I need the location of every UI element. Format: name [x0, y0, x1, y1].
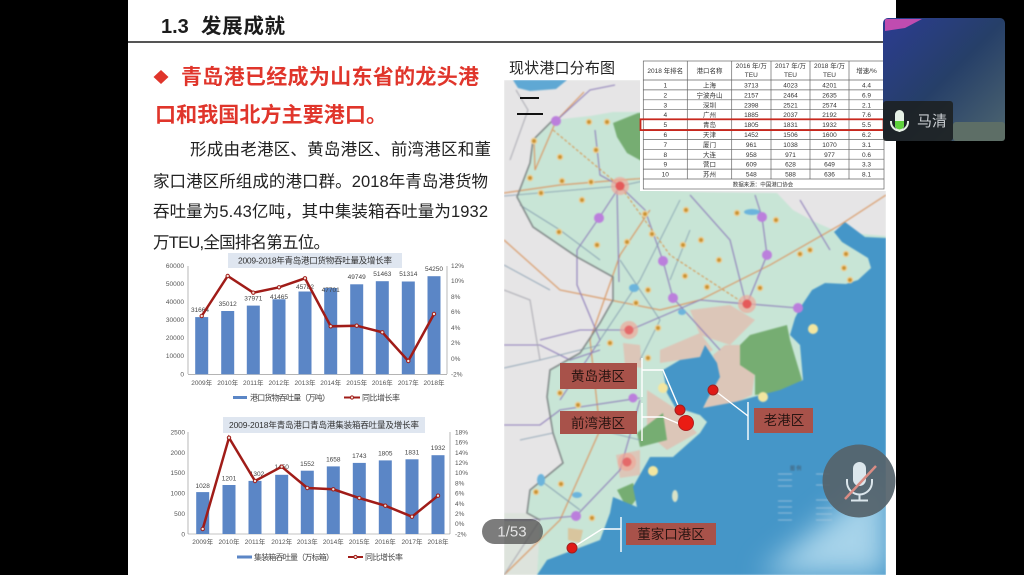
chart: container throughput [171, 417, 468, 562]
chart title: 2009-2018年青岛港口货物吞吐量及增长率 [238, 256, 392, 266]
table: port ranking: 958 [746, 152, 757, 159]
chart: cargo throughput: 4% [451, 325, 461, 332]
chart: cargo throughput: 47701 [322, 287, 340, 294]
chart: cargo throughput: 2013年 [295, 378, 316, 387]
table: port ranking: 港口名称 [696, 66, 723, 75]
body paragraph: 万TEU,全国排名第五位。 [153, 233, 330, 252]
muted microphone button [822, 444, 896, 518]
green zones [613, 113, 802, 510]
table: port ranking: 2018 年/万 [814, 61, 846, 70]
chart title: 2009-2018年青岛港口青岛港集装箱吞吐量及增长率 [229, 420, 419, 430]
chart: container throughput: 2000 [171, 450, 185, 457]
label: dongjiakou port area: 董家口港区 [637, 526, 705, 542]
handwritten strokes [517, 97, 543, 115]
table: port ranking: 5.5 [862, 122, 871, 129]
chart: cargo throughput: 2017年 [398, 378, 419, 387]
icon: microphone [891, 110, 908, 132]
table: port ranking: 1805 [744, 122, 759, 129]
chart: cargo throughput: 2014年 [320, 378, 342, 387]
table: port ranking: 厦门 [703, 140, 716, 149]
key point heading: 青岛港已经成为山东省的龙头港 [181, 65, 479, 89]
roads [504, 92, 886, 575]
chart: container throughput: 8% [455, 480, 465, 488]
chart: container throughput: 14% [455, 450, 468, 457]
legend [233, 392, 400, 402]
table: port ranking: 8.1 [862, 172, 871, 179]
chart: cargo throughput: 41465 [270, 294, 288, 301]
table: port ranking: 2018 年排名 [647, 66, 683, 75]
table: port ranking: 4201 [822, 82, 837, 90]
chart title [223, 417, 425, 433]
chart: container throughput: 10% [455, 470, 468, 477]
chart: cargo throughput: 30000 [166, 317, 184, 324]
body paragraph: 家口港区所组成的港口群。2018年青岛港货物 [153, 172, 488, 191]
chart: cargo throughput: -2% [451, 372, 463, 378]
chart: container throughput: 0% [455, 521, 465, 528]
table: port ranking: 天津 [703, 131, 716, 139]
label: lao port area: 老港区 [764, 413, 804, 428]
chart: cargo throughput: 50000 [166, 281, 184, 288]
table: port ranking: TEU [823, 72, 836, 79]
table: port ranking: 1070 [822, 142, 837, 149]
table: port ranking: 2037 [783, 112, 798, 119]
chart: cargo throughput: 2015年 [346, 378, 368, 387]
page indicator: 1/53 [497, 524, 527, 540]
map title [504, 55, 622, 80]
chart: container throughput: 16% [455, 440, 468, 446]
body paragraph [153, 140, 491, 252]
urban zones [568, 305, 755, 543]
region border strokes [517, 120, 613, 520]
chart: container throughput: 1552 [300, 461, 315, 468]
table: port ranking: 6.2 [862, 132, 871, 139]
table: port ranking: 宁波舟山 [696, 90, 722, 99]
table: port ranking: 4.4 [862, 82, 871, 90]
chart: cargo throughput: 2011年 [243, 378, 264, 387]
chart: container throughput: 0 [181, 532, 185, 538]
table: port ranking: 数据来源：中国港口协会 [733, 180, 794, 188]
table: port ranking: 588 [785, 172, 796, 179]
table: port ranking: 苏州 [703, 170, 716, 179]
table: port ranking: 1932 [822, 122, 837, 129]
land region [517, 112, 886, 575]
chart: container throughput: 2011年 [245, 537, 266, 546]
chart: container throughput: 2% [455, 511, 465, 518]
legend: 集装箱吞吐量（万标箱） [254, 552, 334, 562]
chart: container throughput: 1450 [274, 464, 289, 471]
chart: container throughput: 4% [455, 501, 465, 508]
chart: container throughput: 2010年 [219, 537, 240, 546]
chart: cargo throughput: 2016年 [372, 378, 393, 387]
chart: container throughput: 2014年 [323, 537, 344, 546]
map title: 现状港口分布图 [509, 60, 615, 77]
chart: cargo throughput: 2012年 [269, 378, 290, 387]
table: port ranking: 8 [663, 152, 667, 159]
table: port ranking: 4 [663, 112, 667, 119]
legend: 同比增长率 [362, 392, 400, 402]
table: port ranking: 3 [663, 102, 667, 109]
table: port ranking: 1038 [783, 142, 798, 149]
chart: cargo throughput: 37971 [244, 296, 263, 302]
chart: container throughput: 2013年 [297, 537, 318, 546]
map legend [778, 474, 832, 520]
table: port ranking: 10 [662, 172, 669, 179]
chart: container throughput: 2015年 [349, 537, 370, 546]
body paragraph: 吞吐量为5.43亿吨，其中集装箱吞吐量为1932 [153, 202, 488, 221]
sea [537, 222, 886, 575]
chart: container throughput: 2018年 [428, 537, 449, 546]
table: port ranking: 2157 [744, 92, 759, 99]
yellow sea circles [648, 324, 818, 476]
table: port ranking: 1452 [744, 132, 759, 139]
chart: container throughput: 1201 [222, 476, 237, 482]
chart: container throughput: 2017年 [402, 537, 423, 546]
table: port ranking: 609 [746, 162, 757, 169]
chart: container throughput: 2012年 [271, 537, 293, 546]
chart: container throughput: 1831 [405, 450, 420, 456]
chart: cargo throughput [166, 253, 464, 402]
table: port ranking: 636 [824, 172, 835, 179]
name tag: 马清 [917, 113, 947, 130]
map: port distribution [504, 80, 886, 575]
table: port ranking: 深圳 [703, 100, 716, 109]
chart: cargo throughput: 49749 [348, 274, 366, 281]
label: qianwan port area: 前湾港区 [571, 415, 625, 431]
label: huangdao port area: 黄岛港区 [571, 369, 625, 384]
chart: container throughput: 6% [455, 490, 465, 498]
chart: container throughput: 12% [455, 460, 468, 467]
chart: cargo throughput: 2% [451, 340, 461, 347]
table: port ranking: 4023 [783, 82, 798, 90]
chart: container throughput: 1302 [250, 471, 265, 478]
table: port ranking: 5 [663, 122, 667, 129]
title [161, 14, 286, 38]
table: port ranking: 6.9 [862, 92, 871, 99]
chart: cargo throughput: 0% [451, 356, 461, 363]
label: lao port area [708, 385, 813, 440]
key point heading [154, 65, 479, 127]
table: port ranking: 1 [663, 82, 667, 90]
legend [237, 552, 403, 562]
chart: cargo throughput: 60000 [166, 263, 184, 270]
pink cities [611, 177, 756, 471]
chart: container throughput: 1658 [326, 456, 341, 464]
river at top [513, 80, 567, 91]
table: port ranking: 广州 [703, 110, 716, 119]
chart: cargo throughput: 10000 [166, 353, 184, 360]
key point heading: 口和我国北方主要港口。 [155, 103, 387, 127]
table: port ranking: 3.3 [862, 162, 871, 169]
chart: cargo throughput: 2009年 [191, 378, 213, 387]
table: port ranking: 1831 [783, 122, 798, 129]
chart: container throughput: 1500 [171, 470, 185, 477]
table: port ranking: 971 [785, 152, 796, 159]
chart: cargo throughput: 40000 [166, 299, 184, 306]
table: port ranking: 2521 [783, 102, 798, 109]
chart: container throughput: -2% [455, 532, 467, 538]
map: port distribution: 图 例 [790, 465, 801, 472]
chart: cargo throughput: 51314 [399, 271, 418, 278]
table: port ranking: 7 [663, 142, 667, 149]
label: dongjiakou port area [567, 517, 716, 553]
chart: container throughput: 1805 [378, 450, 393, 458]
chart: container throughput: 18% [455, 430, 468, 436]
table: port ranking: 2464 [783, 92, 798, 99]
chart: cargo throughput: 31664 [191, 307, 209, 314]
table: port ranking: 2574 [822, 102, 837, 109]
table: port ranking: 1506 [783, 132, 798, 139]
title: 发展成就 [201, 14, 286, 38]
chart: cargo throughput: 0 [180, 372, 184, 378]
table: port ranking: 3.1 [862, 142, 871, 149]
table: port ranking: 大连 [703, 150, 716, 159]
chart: cargo throughput: 12% [451, 263, 464, 270]
video tile [883, 18, 1005, 141]
islands [672, 490, 678, 502]
table: port ranking: 3713 [744, 82, 759, 90]
chart: cargo throughput: 35012 [219, 301, 237, 308]
chart: cargo throughput: 45782 [296, 284, 314, 291]
orange town dots [527, 119, 853, 521]
table: port ranking: 0.6 [862, 152, 871, 159]
table: port ranking [640, 55, 888, 191]
table: port ranking: 2 [663, 92, 667, 99]
table: port ranking: 上海 [703, 80, 716, 90]
table: port ranking: TEU [745, 72, 758, 79]
table: port ranking: 2.1 [862, 102, 871, 109]
table: port ranking: 2192 [822, 112, 837, 119]
highlight row: Qingdao [640, 119, 884, 130]
chart: cargo throughput: 2018年 [424, 378, 445, 387]
table: port ranking: 1600 [822, 132, 837, 139]
table: port ranking: 2017 年/万 [775, 61, 807, 70]
label: qianwan port area [560, 403, 694, 441]
table: port ranking: 548 [746, 172, 757, 179]
small lakes [744, 209, 760, 215]
legend: 港口货物吞吐量（万吨） [250, 392, 330, 402]
legend: 同比增长率 [365, 552, 403, 562]
table: port ranking: 增速/% [856, 66, 877, 75]
icon: diamond bullet [154, 70, 168, 84]
chart: cargo throughput: 20000 [166, 335, 184, 342]
chart: container throughput: 2500 [171, 430, 185, 436]
table: port ranking: 7.6 [862, 112, 871, 119]
chart: cargo throughput: 10% [451, 278, 464, 285]
chart: container throughput: 1000 [171, 490, 185, 498]
table: port ranking: 2635 [822, 92, 837, 99]
chart: container throughput: 500 [174, 511, 185, 518]
page indicator [482, 519, 543, 544]
label: huangdao port area [560, 358, 685, 415]
chart: container throughput: 2009年 [192, 537, 214, 546]
table: port ranking: TEU [784, 72, 797, 79]
chart: cargo throughput: 51463 [373, 271, 392, 278]
chart: cargo throughput: 2010年 [217, 378, 239, 387]
chart: container throughput: 1932 [431, 445, 446, 452]
chart: cargo throughput: 8% [451, 294, 461, 301]
purple towns [551, 116, 803, 521]
lighter sea corner [756, 496, 886, 575]
title: 1.3 [161, 16, 189, 38]
table: port ranking: 6 [663, 132, 667, 139]
slide page [128, 0, 896, 575]
chart: container throughput: 1743 [352, 453, 367, 460]
table: port ranking: 977 [824, 152, 835, 159]
chart: cargo throughput: 6% [451, 309, 461, 316]
table: port ranking: 2016 年/万 [736, 61, 767, 70]
chart: container throughput: 2016年 [375, 537, 396, 546]
table: port ranking: 9 [663, 162, 667, 169]
chart title [228, 253, 402, 268]
table: port ranking: 1885 [744, 112, 759, 119]
body paragraph: 形成由老港区、黄岛港区、前湾港区和董 [190, 140, 491, 159]
table: port ranking: 青岛 [703, 120, 716, 129]
chart: cargo throughput: 54250 [425, 266, 443, 273]
table: port ranking: 961 [746, 142, 757, 149]
table: port ranking: 营口 [703, 160, 716, 169]
table: port ranking: 649 [824, 162, 835, 169]
table: port ranking: 2398 [744, 102, 759, 109]
chart: container throughput: 1028 [195, 483, 210, 490]
table: port ranking: 628 [785, 162, 796, 169]
